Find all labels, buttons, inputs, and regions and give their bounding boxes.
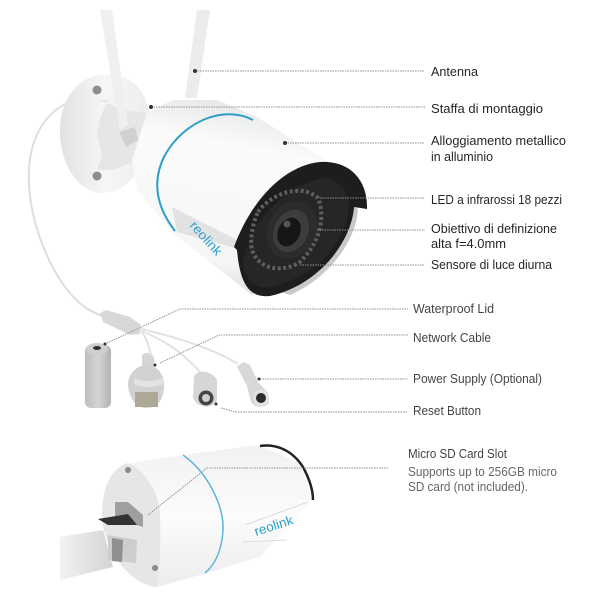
label: Alloggiamento metallico in alluminio	[431, 134, 566, 164]
blue ring	[157, 114, 253, 231]
rear plate	[102, 463, 160, 587]
wall mount plate	[60, 75, 150, 193]
bottom camera	[60, 445, 313, 587]
label: Antenna: Antenna	[431, 65, 478, 79]
label: Micro SD Card Slot: Supports up to 256GB micro	[408, 465, 557, 479]
grey rim behind face	[275, 190, 358, 295]
label: Power Supply: Power Supply (Optional)	[413, 372, 542, 386]
main camera	[29, 10, 367, 316]
antenna knuckle	[119, 127, 138, 147]
cable from camera to connector	[29, 103, 103, 316]
rear antenna	[185, 10, 210, 98]
callout lines	[104, 69, 425, 515]
cable splitter	[100, 310, 141, 335]
BNC reset connector	[193, 372, 217, 407]
front antenna	[100, 10, 128, 130]
micro SD card	[98, 514, 137, 525]
connector accessories	[85, 310, 269, 408]
mount arm	[60, 530, 113, 580]
blue ring	[183, 455, 223, 573]
front black face and hood	[234, 162, 367, 296]
lens	[258, 193, 326, 267]
label: Reset Button: Reset Button	[413, 404, 481, 418]
screws	[125, 467, 158, 571]
label: Obiettivo di definizione: alta f=4.0mm	[431, 237, 506, 251]
label: Micro SD Card Slot	[408, 447, 557, 494]
label: LED a infrarossi 18 pezzi: LED a infrarossi 18 pezzi	[431, 193, 562, 207]
label: Alloggiamento metallico in alluminio: in alluminio	[431, 150, 493, 164]
body	[132, 445, 312, 587]
inner face	[243, 178, 349, 288]
label: Waterproof Lid: Waterproof Lid	[413, 302, 494, 316]
label recess	[172, 207, 237, 248]
IR LED ring	[251, 191, 321, 268]
reolink logo: reolink	[252, 512, 295, 539]
label: Network Cable: Network Cable	[413, 331, 491, 345]
connector wires	[141, 329, 238, 372]
mount stub	[108, 535, 137, 563]
label recess highlights	[242, 502, 308, 542]
network connector	[128, 353, 164, 408]
label: Staffa di montaggio: Staffa di montaggio	[431, 102, 543, 116]
power barrel connector	[237, 362, 269, 407]
label: Obiettivo di definizione: Obiettivo di definizione	[431, 222, 557, 236]
label: Obiettivo di definizione	[431, 222, 557, 251]
mount screws	[92, 86, 102, 180]
label: Sensore di luce diurna: Sensore di luce diurna	[431, 258, 552, 272]
label: Micro SD Card Slot: SD card (not included).	[408, 480, 528, 494]
mount bracket	[97, 100, 150, 170]
label: Micro SD Card Slot: Micro SD Card Slot	[408, 447, 507, 461]
camera body	[132, 100, 340, 295]
reolink logo: reolink	[187, 218, 226, 259]
label: Alloggiamento metallico in alluminio: Alloggiamento metallico	[431, 134, 566, 148]
card slot	[115, 502, 143, 527]
waterproof lid	[85, 343, 111, 408]
hood arc	[260, 445, 313, 500]
